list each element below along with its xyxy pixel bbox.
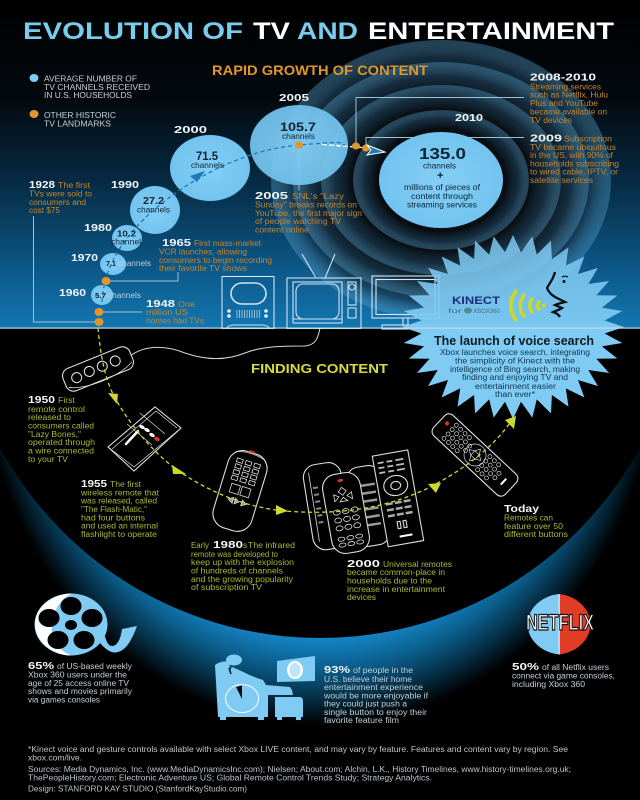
logo: Netflix: NETFLIX	[526, 610, 594, 635]
bubble labels: channels	[118, 259, 151, 268]
bubble 2010	[379, 113, 503, 228]
title: TV	[253, 18, 290, 45]
note: 2009: 2009	[530, 134, 563, 144]
note: early 1980s: The infrared	[248, 541, 295, 550]
title: EVOLUTION OF	[23, 18, 243, 45]
bubble labels: 1980	[84, 223, 113, 234]
note: 2008-2010: Streaming services	[530, 82, 601, 92]
heading: the launch of voice search: The launch of voice search	[434, 333, 594, 348]
note: 1965: First mass-market	[194, 239, 262, 248]
stat: 93 percent: single button to enjoy their	[324, 708, 427, 717]
stat: 93 percent	[323, 665, 429, 725]
note: 1950: consumers called	[28, 422, 94, 430]
note: 2000: increase in entertainment	[347, 585, 446, 594]
leader lines	[34, 98, 524, 322]
note: 1950: to your TV	[28, 455, 69, 464]
stat: 93 percent: entertainment experience	[324, 683, 424, 692]
note: 2005: Sunday" breaks records on	[255, 200, 357, 210]
icon: 1970s television	[287, 254, 361, 328]
note: 2008-2010: TV devices	[530, 116, 572, 125]
note: 1955: "The Flash-Matic,"	[81, 505, 147, 514]
bubble 2010: +	[437, 170, 443, 182]
note: today: feature over 50	[504, 522, 564, 531]
icon: flat screen television	[372, 276, 439, 329]
legend: AVERAGE NUMBER OF	[44, 74, 137, 84]
bubble labels: 5.7	[95, 291, 106, 300]
logo: Kinect for Xbox 360: for	[448, 309, 462, 315]
note: 1955: and used an internal	[81, 522, 158, 530]
stat: 65 percent: via games consoles	[28, 696, 100, 704]
icon: today's remote	[430, 411, 520, 499]
icon: sound waves	[511, 291, 545, 320]
note: today: different buttons	[504, 530, 568, 539]
title: AND	[297, 18, 358, 45]
logo: Kinect for Xbox 360: XBOX360	[473, 309, 501, 315]
heading: rapid growth of content: RAPID GROWTH OF CONTENT	[212, 62, 428, 78]
bubble labels: channels	[282, 132, 315, 141]
note: early 1980s: and the growing popularity	[191, 575, 293, 584]
bubble 2010: millions of pieces of	[404, 183, 481, 192]
note: 1950: released to	[28, 413, 72, 422]
bubble labels: 2005	[279, 93, 310, 104]
note: 1965: their favorite TV shows	[159, 264, 247, 273]
note: today: Today	[504, 504, 540, 515]
note: 2009: to wired cable, IPTV, or	[530, 168, 618, 176]
text block: voice search	[440, 348, 590, 399]
bubble labels: channels	[137, 206, 170, 214]
note: 1955: flashlight to operate	[81, 530, 158, 539]
stat: 93 percent: would be more enjoyable if	[323, 692, 429, 700]
note: 2005: SNL's "Lazy	[292, 192, 344, 201]
bubble labels: channels	[191, 161, 224, 170]
text block: voice search: intelligence of Bing search, making	[450, 365, 580, 374]
landmark dots	[94, 142, 370, 326]
note: 2000: Universal remotes	[383, 560, 452, 569]
note: 2008-2010: such as Netflix, Hulu	[530, 90, 608, 100]
note: 2009: Subscription	[564, 134, 612, 144]
note: 1948: homes had TVs	[146, 316, 204, 326]
footer: notes and sources: ThePeopleHistory.com; Electronic Adventure US; Global Remote Control Trends Study; Strategy Analytics.	[28, 774, 432, 782]
remote: back left	[302, 461, 353, 552]
bubble labels: channels	[108, 291, 141, 300]
note: 1955: wireless remote that	[80, 488, 160, 498]
bubble labels: 27.2	[143, 196, 164, 207]
growth trend dashed line	[102, 143, 368, 302]
note: 1950: "Lazy Bones,"	[28, 430, 81, 439]
bubble 2010: content through	[411, 192, 473, 201]
heading: finding content: FINDING CONTENT	[251, 361, 388, 376]
icon: person in recliner watching screen	[215, 654, 315, 720]
note: early 1980s: of subscription TV	[191, 583, 263, 592]
note: 1928	[29, 180, 93, 215]
note: early 1980s: Early	[191, 541, 209, 550]
icon: Flash-Matic remote	[108, 407, 181, 471]
text block: voice search: Xbox launches voice search, integrating	[440, 348, 590, 357]
footer: notes and sources: Sources: Media Dynamics, Inc. (www.MediaDynamicsInc.com); Nielsen; About.com; Alchin, L.K., History Timelines, www.history-timelines.org.uk;	[28, 765, 571, 774]
bubble labels: 1990	[111, 180, 140, 191]
legend	[30, 74, 150, 128]
stat: 50 percent: including Xbox 360	[512, 680, 586, 689]
note: 1928: The first	[58, 181, 91, 190]
note: early 1980s: keep up with the explosion	[191, 558, 294, 567]
note: 1928: cost $75	[29, 206, 61, 215]
note: 2008-2010: became available on	[530, 108, 607, 116]
note: 2000: devices	[347, 593, 376, 602]
note: 2008-2010: Plus and YouTube	[530, 99, 599, 108]
note: 2009: satellite services	[530, 176, 593, 185]
note: early 1980s: of hundreds of channels	[191, 566, 283, 576]
stat: 93 percent: U.S. believe their home	[324, 675, 413, 684]
horizon line	[0, 328, 640, 329]
stat: 93 percent: of people in the	[353, 666, 414, 675]
note: 2000: households due to the	[347, 576, 433, 586]
bubble 2010: streaming services	[407, 200, 477, 210]
note: 2005: of people watching TV	[255, 217, 342, 226]
channel bubbles	[91, 105, 348, 305]
footer: notes and sources	[28, 745, 571, 794]
remote timeline dashed path	[98, 328, 512, 512]
stat: 65 percent: of US-based weekly	[57, 662, 132, 671]
note: 1948: One	[178, 300, 196, 309]
bubble labels: 7.1	[106, 259, 116, 268]
icon: film reel	[34, 594, 137, 656]
title	[23, 18, 614, 45]
bubble labels: 105.7	[280, 120, 316, 134]
note: today	[504, 504, 568, 539]
note: early 1980s: remote was developed to	[191, 550, 279, 559]
bubble labels: channel	[111, 238, 141, 246]
note: 2000: became common-place in	[347, 568, 445, 577]
note: 2008-2010	[530, 72, 608, 125]
bubble 2010: channels	[423, 162, 456, 170]
text block: voice search: finding and enjoying TV and	[462, 373, 568, 382]
note: 1948: million US	[146, 308, 188, 317]
note: 1928: consumers and	[29, 198, 86, 207]
note: today: Remotes can	[504, 514, 553, 522]
bubble labels: 1970	[71, 253, 99, 264]
bubble 2010: 2010	[455, 113, 484, 124]
icon: universal remotes 2000	[302, 450, 424, 556]
wire of first remote	[130, 328, 320, 359]
note: 1950: remote control	[28, 405, 85, 414]
note: 1948: 1948	[146, 299, 176, 310]
remote: middle front	[320, 470, 372, 556]
stat: 50 percent: of all Netflix users	[542, 663, 609, 672]
remote: front right	[372, 450, 424, 547]
note: 1955: 1955	[81, 479, 108, 490]
icon: vintage television	[222, 276, 274, 328]
footer: notes and sources: *Kinect voice and gesture controls available with select Xbox LIVE content, and may vary by feature. Features and content vary by region. See	[28, 745, 569, 754]
stat: 50 percent: 50%	[512, 662, 539, 673]
note: early 1980s: s	[243, 541, 247, 550]
arrow: end of growth line	[367, 145, 385, 155]
note: 1950: a wire connected	[28, 446, 94, 456]
arrows on remote timeline	[108, 393, 516, 515]
note: 2009: in the US, with 90% of	[530, 151, 614, 160]
note: 1950	[28, 395, 95, 464]
note: 1950: operated through	[28, 438, 95, 447]
bubble 2010: 135.0	[419, 146, 466, 163]
stat: 93 percent: favorite feature film	[324, 716, 399, 725]
note: 1965: 1965	[162, 238, 192, 249]
note: 2005: content online	[255, 226, 310, 234]
stat: 50 percent	[512, 662, 615, 689]
note: 1955	[80, 479, 160, 539]
note: 2005	[255, 191, 362, 234]
stat: 65 percent: 65%	[28, 661, 54, 672]
note: 1965: consumers to begin recording	[159, 256, 272, 265]
icon: early 1980s remote	[209, 445, 271, 535]
logo: Kinect for Xbox 360: KINECT	[452, 295, 500, 307]
logo: Netflix	[526, 594, 594, 654]
note: 1965	[159, 238, 272, 273]
note: 1965: VCR launches, allowing	[159, 248, 247, 256]
legend: TV CHANNELS RECEIVED	[44, 83, 150, 92]
note: 1955: The first	[110, 480, 142, 489]
stat: 65 percent: shows and movies primarily	[28, 687, 132, 696]
note: 1928: TVs were sold to	[29, 190, 93, 198]
note: 1950: 1950	[28, 395, 56, 406]
note: 2008-2010: 2008-2010	[530, 72, 597, 84]
concentric content rings	[271, 40, 611, 320]
note: 1950: First	[58, 396, 76, 405]
note: 1928: 1928	[29, 180, 56, 191]
note: 1948	[146, 299, 204, 326]
note: 2005: YouTube, the first major sign	[255, 209, 362, 218]
remote: back middle	[345, 464, 391, 548]
note: 2009: households subscribing	[530, 160, 619, 168]
text block: voice search: than ever*	[495, 390, 535, 399]
stat: 65 percent: Xbox 360 users under the	[28, 670, 128, 680]
note: 1955: had four buttons	[81, 514, 145, 522]
bubble labels: 2000	[174, 125, 208, 136]
legend: IN U.S. HOUSEHOLDS	[44, 91, 132, 100]
footer: notes and sources: Design: STANFORD KAY STUDIO (StanfordKayStudio.com)	[28, 784, 247, 794]
note: early 1980s: 1980	[213, 540, 244, 551]
footer: notes and sources: xbox.com/live.	[28, 754, 82, 762]
note: 2009: TV became ubiquitous	[530, 143, 616, 152]
stat: 65 percent: age of 25 access online TV	[28, 679, 130, 688]
note: 2009	[530, 134, 619, 185]
note: early 1980s	[191, 540, 295, 592]
legend: TV LANDMARKS	[44, 120, 111, 128]
stat: 50 percent: connect via game consoles,	[512, 672, 615, 680]
bubble labels: 10.2	[117, 228, 136, 238]
icon: speaking face	[547, 272, 568, 317]
bubble labels	[59, 93, 316, 300]
text block: voice search: entertainment easier	[475, 382, 556, 391]
title: ENTERTAINMENT	[368, 18, 614, 45]
stat: 93 percent: 93%	[324, 665, 350, 676]
note: 2000	[347, 559, 452, 602]
logo: Kinect for Xbox 360	[448, 295, 501, 315]
text block: voice search: the simplicity of Kinect with the	[455, 356, 576, 366]
note: 1955: was released, called	[80, 496, 157, 506]
note: 2005: 2005	[255, 191, 289, 202]
stat: 65 percent	[28, 661, 132, 704]
starburst: voice search callout	[402, 235, 624, 419]
icon: Lazy Bones remote	[60, 344, 136, 394]
note: 2000: 2000	[347, 559, 381, 570]
stat: 93 percent: they could just push a	[324, 700, 408, 708]
bubble labels: 1960	[59, 288, 87, 299]
legend: OTHER HISTORIC	[44, 111, 116, 120]
bubble labels: 71.5	[196, 149, 218, 163]
